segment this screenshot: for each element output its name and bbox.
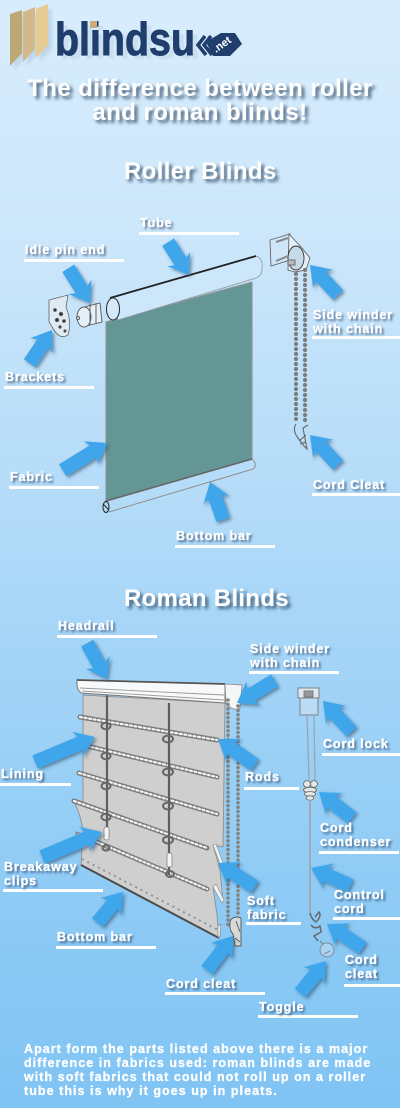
label: idle pin end: Idle pin end: [25, 243, 105, 257]
arrow: lining: [30, 725, 100, 774]
arrow: side cord cleat: [319, 913, 370, 959]
title: and roman blinds!: [92, 99, 308, 126]
label: control cord: cord: [334, 902, 365, 916]
label: side cord cleat: [344, 953, 400, 987]
tube: [106, 256, 262, 320]
label: toggle: Toggle: [259, 1000, 304, 1014]
label: soft fabric: fabric: [247, 908, 286, 922]
idle pin end: [76, 303, 102, 327]
roman fabric: [73, 695, 225, 938]
label: rods: Rods: [245, 770, 280, 784]
label: brackets: Brackets: [5, 370, 65, 384]
label: roman bottom bar: [56, 930, 156, 949]
label: breakaway clips: Breakaway: [4, 860, 77, 874]
toggle: [320, 941, 334, 957]
headrail: [77, 680, 242, 709]
control cords: [107, 694, 169, 875]
arrow: cord condenser: [311, 781, 360, 828]
arrow: roman cord cleat: [196, 928, 244, 978]
beaded chain: [296, 270, 305, 424]
label: fabric: [9, 470, 99, 489]
label: roman side winder with chain: [249, 642, 339, 674]
logo: [10, 4, 242, 69]
heading: roller blinds: Roller Blinds: [124, 158, 277, 185]
label: fabric: Fabric: [10, 470, 53, 484]
bottom bar: [103, 459, 255, 512]
label: soft fabric: [246, 894, 301, 925]
arrow: idle pin end: [57, 261, 101, 310]
cord condenser: [304, 781, 318, 800]
arrow: fabric: [56, 431, 114, 482]
label: soft fabric: Soft: [247, 894, 275, 908]
arrow: side winder: [300, 256, 348, 304]
callout arrows: [18, 235, 370, 1001]
twin cords: [307, 715, 315, 780]
label: cord lock: [322, 737, 400, 756]
label: cord condenser: [319, 821, 399, 854]
label: breakaway clips: clips: [4, 874, 37, 888]
label: side cord cleat: Cord: [345, 953, 378, 967]
label: roman side winder with chain: Side winder: [250, 642, 330, 656]
arrow: headrail: [75, 637, 119, 686]
cord rings: [102, 723, 174, 877]
footer text: Apart form the parts listed above there is a major: [24, 1042, 368, 1056]
arrow: cord lock: [313, 692, 362, 741]
label: rods: [244, 770, 299, 790]
fabric panel: [106, 282, 252, 501]
label: lining: Lining: [1, 767, 44, 781]
arrow: toggle: [290, 953, 336, 1001]
label: side winder with chain: [312, 308, 400, 339]
arrow: soft fabric: [211, 852, 262, 898]
arrow: cord cleat: [300, 426, 348, 474]
label: cord condenser: condenser: [320, 835, 391, 849]
footer text: tube this is why it goes up in pleats.: [24, 1084, 278, 1098]
logo: blindsu: [55, 13, 195, 65]
label: roman side winder with chain: with chain: [250, 656, 320, 670]
label: lining: [0, 767, 71, 786]
logo tag: .net: [206, 33, 242, 56]
title: [27, 75, 377, 126]
title: The difference between roller: [27, 75, 373, 102]
label: roman bottom bar: Bottom bar: [57, 930, 133, 944]
arrow: brackets: [18, 322, 63, 371]
label: toggle: [258, 1000, 358, 1018]
label: control cord: [333, 888, 400, 920]
beaded chain: [228, 700, 238, 925]
footer text: [24, 1042, 371, 1098]
arrow: tube: [157, 235, 200, 282]
label: control cord: Control: [334, 888, 385, 902]
arrow: rods: [210, 728, 263, 776]
roman blind diagram: [73, 680, 242, 946]
label: roman cord cleat: Cord cleat: [166, 977, 236, 991]
arrow: roman side winder: [230, 669, 282, 715]
label: cord condenser: Cord: [320, 821, 353, 835]
arrow: control cord: [306, 856, 356, 898]
bracket: [49, 295, 70, 337]
label: brackets: [4, 370, 94, 389]
roller blind diagram: [49, 234, 310, 512]
footer text: difference in fabrics used: roman blinds are made: [24, 1056, 371, 1070]
label: headrail: Headrail: [58, 619, 115, 633]
label: bottom bar: [175, 529, 275, 548]
label: breakaway clips: [3, 860, 103, 892]
side cord cleat: [310, 912, 321, 941]
label: cord lock: Cord lock: [323, 737, 389, 751]
label: side winder with chain: Side winder: [313, 308, 393, 322]
arrow: breakaway clips: [37, 820, 107, 869]
label: bottom bar: Bottom bar: [176, 529, 252, 543]
heading: roman blinds: Roman Blinds: [124, 585, 289, 612]
label: side winder with chain: with chain: [313, 322, 383, 336]
control cord: [309, 800, 311, 915]
label: cord cleat: Cord Cleat: [313, 478, 385, 492]
label: cord cleat: [312, 478, 400, 496]
label: side cord cleat: cleat: [345, 967, 378, 981]
side control cord assembly: [298, 688, 334, 957]
arrow: bottom bar: [197, 478, 236, 524]
cord cleat: [230, 917, 241, 946]
logo: .net: [211, 34, 234, 55]
label: tube: Tube: [140, 216, 173, 230]
logo wordmark: blindsu: [60, 17, 200, 69]
cord lock: [298, 688, 319, 715]
bottom bar: [81, 859, 221, 938]
footer text: with soft fabrics that could not roll up on a roller: [24, 1070, 366, 1084]
arrow: roman bottom bar: [87, 883, 133, 931]
logo icon: gold blind strips: [10, 4, 48, 66]
label: tube: [139, 216, 239, 235]
side winder bracket: [270, 234, 310, 272]
rods: [74, 717, 217, 889]
label: headrail: [57, 619, 157, 638]
pleat highlights: [213, 844, 225, 903]
label: roman cord cleat: [165, 977, 265, 995]
breakaway clips: [76, 827, 172, 867]
label: idle pin end: [24, 243, 124, 262]
cord cleat: [294, 424, 308, 449]
